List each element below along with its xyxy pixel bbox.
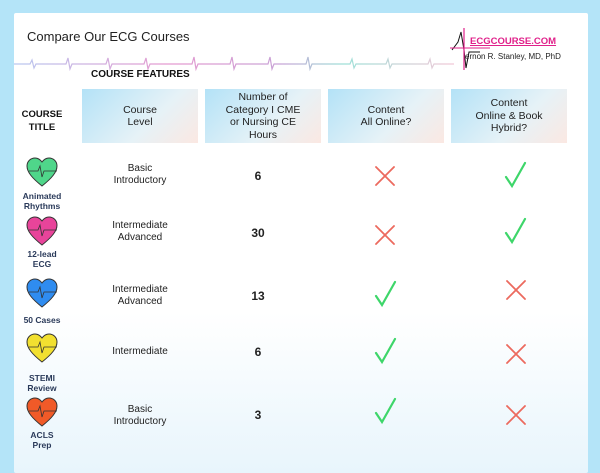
logo: ernon R. Stanley, MD, PhD	[465, 52, 561, 61]
row 5	[26, 398, 526, 450]
row 3: 13	[251, 289, 265, 303]
row 3	[24, 278, 526, 325]
header: hours: Category I CME	[226, 104, 300, 116]
row 5: 3	[255, 408, 261, 422]
text: ECG	[33, 259, 51, 269]
icon: green heart	[26, 158, 58, 187]
title: Compare Our ECG Courses	[27, 29, 190, 44]
course title label: COURSE	[22, 109, 62, 120]
row 5: ACLS	[30, 430, 54, 440]
course title label	[22, 109, 62, 133]
section heading: COURSE FEATURES	[91, 69, 190, 80]
header: course level: Level	[127, 116, 153, 128]
header: course level: Course	[123, 104, 157, 116]
row 1: 6	[255, 169, 261, 183]
row 1	[22, 158, 526, 211]
row 2: Advanced	[118, 232, 162, 243]
row 4: Intermediate	[112, 346, 168, 357]
row 1: Animated	[23, 191, 61, 201]
header: hybrid: Content	[491, 97, 527, 109]
header: all online: All Online?	[361, 116, 411, 128]
course title label: TITLE	[29, 122, 55, 133]
row 5: Introductory	[114, 416, 166, 427]
text: Rhythms	[24, 201, 60, 211]
icon: red x	[375, 166, 395, 186]
header: all online: Content	[368, 104, 404, 116]
row 4: Review	[27, 383, 57, 393]
header: hybrid: Online & Book	[475, 110, 543, 122]
header: hours: Number of	[238, 91, 288, 103]
row 3: Intermediate	[112, 284, 168, 295]
row 3: Advanced	[118, 296, 162, 307]
row 5: Basic	[128, 404, 152, 415]
icon: pink heart	[26, 216, 58, 246]
ecg line decoration	[14, 56, 454, 71]
header: hybrid: Hybrid?	[491, 122, 527, 134]
logo: ECGCOURSE.COM	[470, 36, 556, 47]
row 3: 50 Cases	[24, 315, 60, 325]
icon: blue heart	[26, 278, 58, 308]
header: hours: or Nursing CE	[230, 116, 296, 128]
row 2: 12-lead	[27, 249, 57, 259]
row 4	[26, 334, 526, 393]
row 1: Introductory	[114, 175, 166, 186]
row 5: Prep	[33, 440, 51, 450]
icon: orange heart	[26, 398, 58, 427]
logo	[450, 28, 561, 70]
icon: green check	[504, 162, 526, 188]
header: hours: Hours	[249, 128, 277, 140]
row 2: 30	[251, 226, 265, 240]
header: hours	[205, 89, 321, 143]
row 4: 6	[255, 345, 261, 359]
row 1: Basic	[128, 163, 152, 174]
header: all online	[328, 89, 444, 143]
header: course level	[82, 89, 198, 143]
header: hybrid	[451, 89, 567, 143]
row 4: STEMI	[29, 373, 55, 383]
icon: yellow heart	[26, 334, 58, 363]
row 2: Intermediate	[112, 220, 168, 231]
row 2	[26, 216, 526, 269]
